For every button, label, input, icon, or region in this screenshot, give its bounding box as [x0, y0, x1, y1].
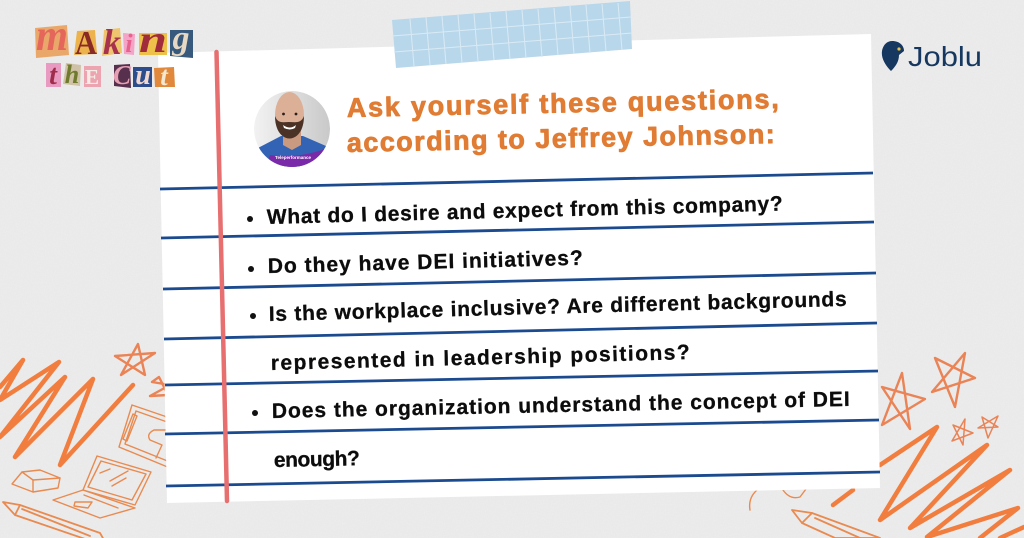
- question 4: enough?: [274, 447, 360, 472]
- portrait: Jeffrey Johnson: [252, 91, 332, 170]
- icon: bird: [882, 41, 904, 71]
- doodle fragments under the paper: [750, 489, 806, 510]
- logo: Making the Cut: n: [139, 19, 167, 61]
- heading: Ask yourself these questions,: [346, 84, 779, 123]
- left orange scribble: [0, 360, 133, 465]
- left stars: [115, 344, 170, 396]
- heading: according to Jeffrey Johnson:: [346, 119, 775, 158]
- question 4: [252, 388, 850, 472]
- logo: Making the Cut: h: [65, 60, 79, 89]
- logo: Making the Cut: g: [172, 20, 190, 57]
- logo: Making the Cut: [35, 11, 193, 91]
- logo: Joblu: [882, 41, 982, 72]
- question 2: Do they have DEI initiatives?: [268, 247, 583, 278]
- logo: Making the Cut: m: [36, 11, 68, 60]
- question 1: What do I desire and expect from this company?: [267, 192, 783, 229]
- icon: eraser doodle: [12, 470, 60, 492]
- logo: Making the Cut: k: [103, 22, 121, 62]
- logo: Making the Cut: C: [113, 60, 132, 90]
- question 3: represented in leadership positions?: [271, 341, 690, 375]
- portrait: Jeffrey Johnson: Teleperformance: [275, 155, 311, 160]
- right stars: [882, 353, 998, 445]
- icon: left pencil doodle: [3, 502, 104, 538]
- logo: Making the Cut: i: [125, 29, 133, 58]
- panel: notebook paper: [158, 34, 880, 503]
- logo: Making the Cut: t: [160, 61, 169, 91]
- ruled lines: [160, 173, 880, 486]
- icon: laptop doodle: [53, 456, 151, 518]
- questions list: [247, 192, 850, 472]
- logo: Making the Cut: A: [75, 25, 97, 62]
- logo: Making the Cut: E: [85, 65, 99, 89]
- logo: Making the Cut: t: [49, 60, 58, 91]
- logo: Making the Cut: u: [135, 60, 151, 91]
- icon: clipboard doodle: [119, 405, 170, 468]
- icon: right pencil doodle: [792, 510, 880, 538]
- right orange scribble: [833, 427, 1024, 538]
- heading: [346, 84, 779, 158]
- question 3: [250, 288, 847, 375]
- logo: Joblu: Joblu: [908, 41, 982, 72]
- question 3: Is the workplace inclusive? Are different backgrounds: [269, 288, 847, 326]
- washi tape: [392, 1, 632, 68]
- question 4: Does the organization understand the concept of DEI: [272, 388, 850, 423]
- red margin line: [216, 52, 227, 501]
